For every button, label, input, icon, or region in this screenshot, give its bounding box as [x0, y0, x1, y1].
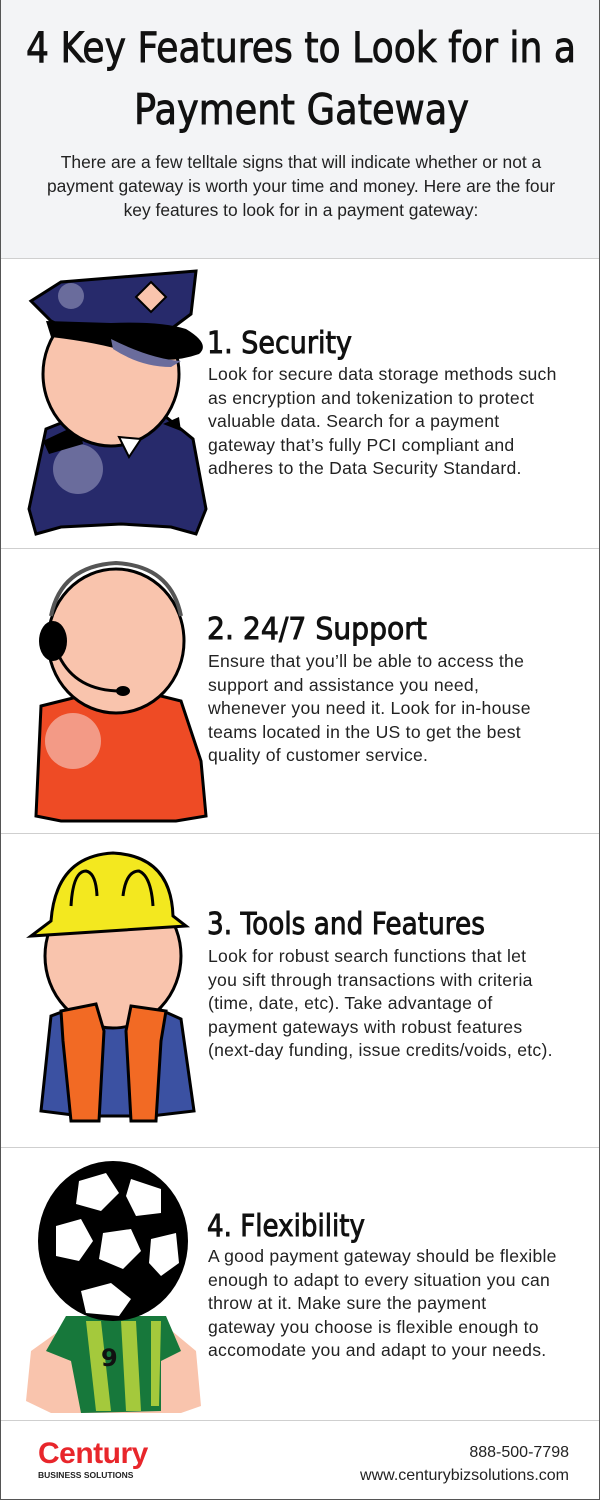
text: support: teams located in the US to get the best [208, 722, 521, 742]
text: security [208, 364, 557, 478]
contact info: 888-500-7798 [469, 1444, 569, 1461]
intro text: There are a few telltale signs that will indicate whether or not a [61, 152, 541, 172]
heading: flexibility: 4. Flexibility [207, 1209, 365, 1244]
logo: BUSINESS SOLUTIONS [38, 1470, 133, 1480]
heading: support: 2. 24/7 Support [207, 612, 427, 647]
text: security: Look for secure data storage methods such [208, 364, 557, 384]
text: security: adheres to the Data Security Standard. [208, 458, 522, 478]
icon: construction worker [26, 852, 196, 1122]
text: security: gateway that’s fully PCI compliant and [208, 435, 514, 455]
text: support: whenever you need it. Look for in-house [208, 698, 531, 718]
text: tools [208, 946, 553, 1060]
text: flexibility: accomodate you and adapt to your needs. [208, 1340, 546, 1360]
icon: support agent [34, 561, 208, 822]
header panel [1, 0, 600, 258]
icon: soccer player: 9 [101, 1344, 118, 1372]
icon: police officer [28, 269, 208, 536]
title: Payment Gateway [134, 85, 469, 134]
text: tools: you sift through transactions with criteria [208, 970, 533, 990]
heading: security: 1. Security [207, 326, 352, 361]
title [26, 23, 576, 134]
text: security: as encryption and tokenization to protect [208, 388, 534, 408]
text: support: Ensure that you’ll be able to access the [208, 651, 524, 671]
text: flexibility: gateway you choose is flexible enough to [208, 1317, 539, 1337]
text: tools: Look for robust search functions that let [208, 946, 526, 966]
text: tools: (time, date, etc). Take advantage of [208, 993, 492, 1013]
text: tools: (next-day funding, issue credits/voids, etc). [208, 1040, 553, 1060]
text: support: support and assistance you need, [208, 675, 479, 695]
intro text: payment gateway is worth your time and money. Here are the four [47, 176, 555, 196]
panel: support [1, 548, 600, 834]
heading: tools: 3. Tools and Features [207, 907, 485, 942]
text: flexibility: throw at it. Make sure the payment [208, 1293, 486, 1313]
text: support [208, 651, 531, 765]
panel: security [1, 258, 600, 549]
text: flexibility [208, 1246, 557, 1360]
text: tools: payment gateways with robust features [208, 1017, 522, 1037]
intro text [47, 152, 555, 220]
text: security: valuable data. Search for a payment [208, 411, 499, 431]
icon: soccer player [26, 1161, 201, 1413]
intro text: key features to look for in a payment gateway: [124, 200, 478, 220]
text: flexibility: A good payment gateway should be flexible [208, 1246, 557, 1266]
panel: tools [1, 833, 600, 1148]
text: flexibility: enough to adapt to every situation you can [208, 1270, 550, 1290]
logo: Century [38, 1437, 148, 1470]
contact info [360, 1444, 569, 1484]
contact info: www.centurybizsolutions.com [360, 1467, 569, 1484]
text: support: quality of customer service. [208, 745, 428, 765]
panel: flexibility [1, 1147, 600, 1421]
footer [1, 1420, 600, 1500]
